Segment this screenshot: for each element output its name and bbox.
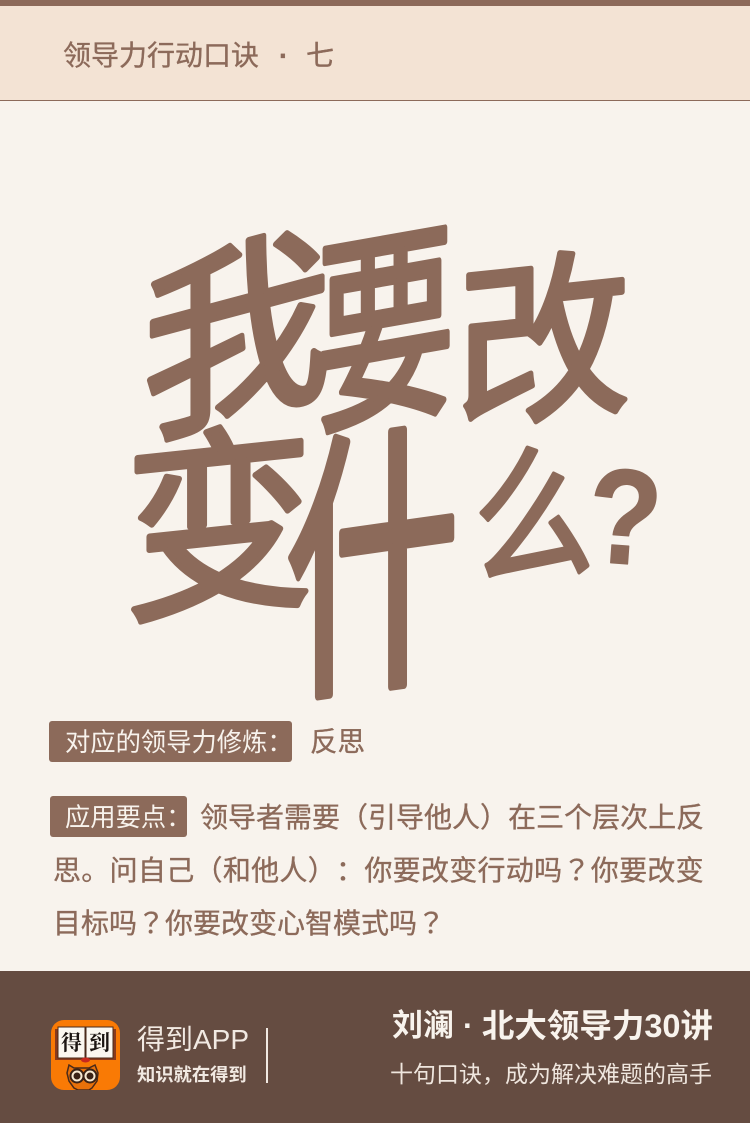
header title: · <box>279 40 288 71</box>
icon: app logo with book and owl: 到 <box>89 1027 110 1057</box>
tag: practice label: 对应的领导力修炼： <box>65 729 293 757</box>
icon: app logo with book and owl <box>51 1020 120 1090</box>
icon: app logo with book and owl: 得 <box>61 1027 82 1057</box>
title character 4: 变 <box>124 356 314 665</box>
header title: 领导力行动口诀 <box>63 40 259 71</box>
course subtitle: 十句口诀，成为解决难题的高手 <box>390 1061 712 1087</box>
app slogan: 知识就在得到 <box>137 1064 247 1085</box>
tag: application label <box>50 796 187 837</box>
course title: 北大领导力30讲 <box>482 1008 713 1044</box>
practice label row <box>49 721 365 762</box>
course title: 刘澜 <box>392 1008 454 1043</box>
divider <box>266 1028 268 1083</box>
practice value: 反思 <box>310 726 365 757</box>
tag: practice label <box>49 721 292 762</box>
title character 2: 要 <box>315 150 455 479</box>
title question mark: ? <box>583 440 667 596</box>
application points block <box>50 796 704 942</box>
body line 1: 领导者需要（引导他人）在三个层次上反 <box>200 796 704 836</box>
header title: 七 <box>306 40 334 71</box>
tag: application label: 应用要点： <box>65 804 192 832</box>
header band <box>0 0 750 101</box>
course title: · <box>463 1008 473 1043</box>
title character 3: 改 <box>455 189 631 468</box>
body line 2: 思。问自己（和他人）：你要改变行动吗？你要改变 <box>53 849 704 889</box>
app name: 得到APP <box>137 1024 249 1055</box>
title character 1: 我 <box>142 155 332 487</box>
footer band <box>0 971 750 1123</box>
title character 6: 么 <box>474 393 594 616</box>
calligraphy title <box>124 150 667 720</box>
body line 3: 目标吗？你要改变心智模式吗？ <box>53 902 445 942</box>
